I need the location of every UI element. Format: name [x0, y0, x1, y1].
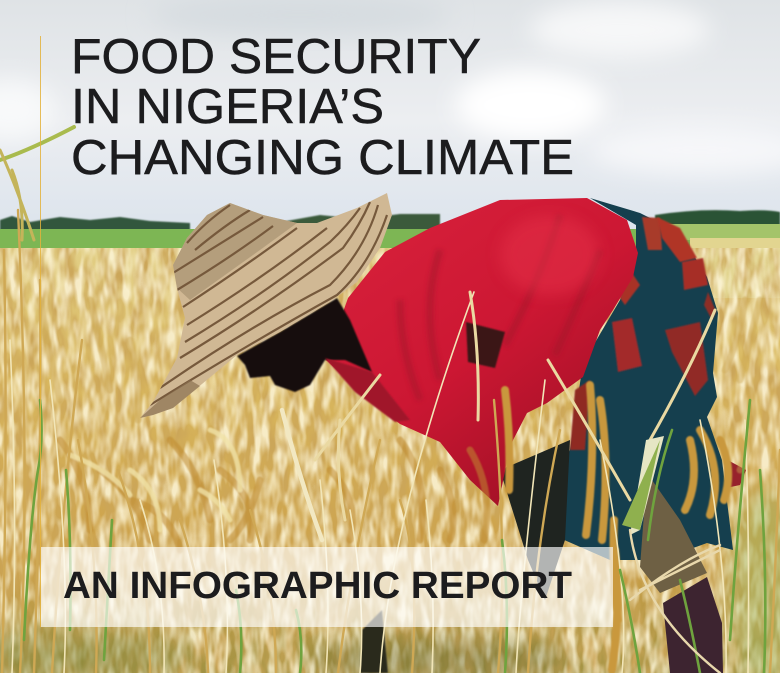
grain clusters — [40, 300, 760, 670]
farmer figure — [140, 193, 746, 673]
accent rule — [40, 36, 41, 627]
title: IN NIGERIA’S — [71, 80, 384, 134]
shirt highlight — [500, 215, 600, 295]
red shirt — [326, 198, 638, 506]
straw hat — [140, 193, 392, 418]
skirt wrapper — [530, 198, 733, 560]
title: FOOD SECURITY — [71, 30, 481, 84]
distant tree line and green paddy — [0, 210, 780, 253]
rice field — [0, 238, 780, 673]
shirt folds — [400, 215, 600, 400]
subtitle banner: AN INFOGRAPHIC REPORT — [63, 565, 572, 607]
sky with clouds — [0, 0, 780, 240]
subtitle banner — [41, 547, 613, 627]
sleeve shadow — [466, 322, 505, 368]
legs — [360, 440, 723, 673]
lower sleeve shadow — [325, 358, 410, 422]
face and neck shadow — [237, 298, 372, 392]
title: CHANGING CLIMATE — [71, 131, 574, 185]
hand — [724, 458, 746, 488]
title — [71, 30, 574, 185]
